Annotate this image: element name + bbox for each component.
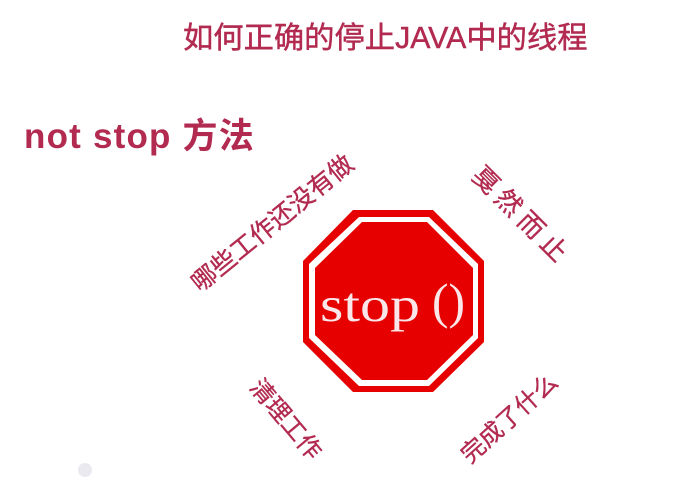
sign text [320,273,465,332]
rotated label: cleanup work: 清理工作 [244,374,327,465]
heading: not stop method: not stop 方法 [24,117,255,156]
title: 如何正确的停止JAVA中的线程 [183,22,588,55]
rotated label: what work is unfinished: 哪些工作还没有做 [186,150,359,297]
rotated label: abrupt stop: 戛然而止 [466,160,578,272]
sign text: stop [320,277,420,332]
rotated label: what was completed: 完成了什么 [456,368,563,469]
decorative cursor dot [78,463,92,477]
sign text: () [432,273,465,329]
